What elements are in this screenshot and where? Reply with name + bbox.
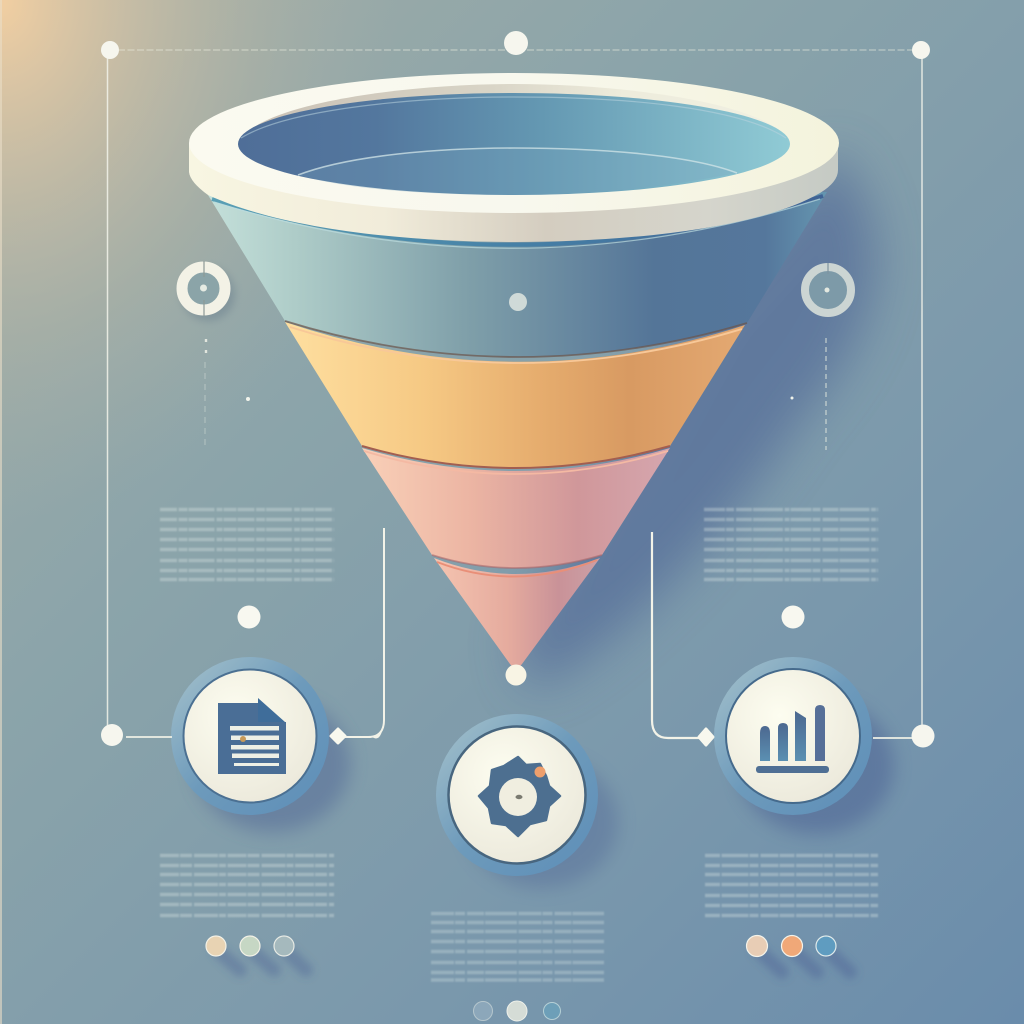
connector left [126, 528, 384, 743]
dotted connector right [790, 338, 826, 450]
indicator dots right [746, 936, 850, 972]
text block lower left [160, 856, 334, 916]
icon badge: gear [436, 714, 618, 888]
text block lower right [705, 856, 878, 916]
connector right [652, 532, 912, 745]
text block upper right [704, 510, 878, 580]
target ring left [181, 261, 235, 321]
dotted connector left [205, 339, 250, 446]
funnel opening [238, 84, 790, 195]
indicator dots center [474, 1001, 560, 1021]
icon: gear [479, 757, 560, 836]
icon badge: document [171, 657, 350, 832]
funnel section 1 blue [208, 192, 827, 357]
funnel shadow [515, 150, 876, 690]
frame lines and nodes [101, 31, 934, 748]
target ring right [805, 263, 851, 313]
indicator dots left [206, 936, 306, 970]
funnel tip dot [506, 664, 526, 686]
icon: bar chart [756, 705, 829, 773]
funnel rim [189, 73, 839, 242]
icon: document [218, 698, 286, 774]
funnel section 2 orange [285, 322, 745, 468]
funnel section 4 tip [434, 558, 600, 668]
node dot left [238, 606, 260, 628]
icon badge: bar chart [714, 657, 894, 834]
funnel section 3 pink [362, 448, 670, 568]
funnel [189, 73, 839, 668]
text block upper left [160, 510, 334, 580]
node dot right [782, 606, 804, 628]
text block center [431, 914, 604, 980]
